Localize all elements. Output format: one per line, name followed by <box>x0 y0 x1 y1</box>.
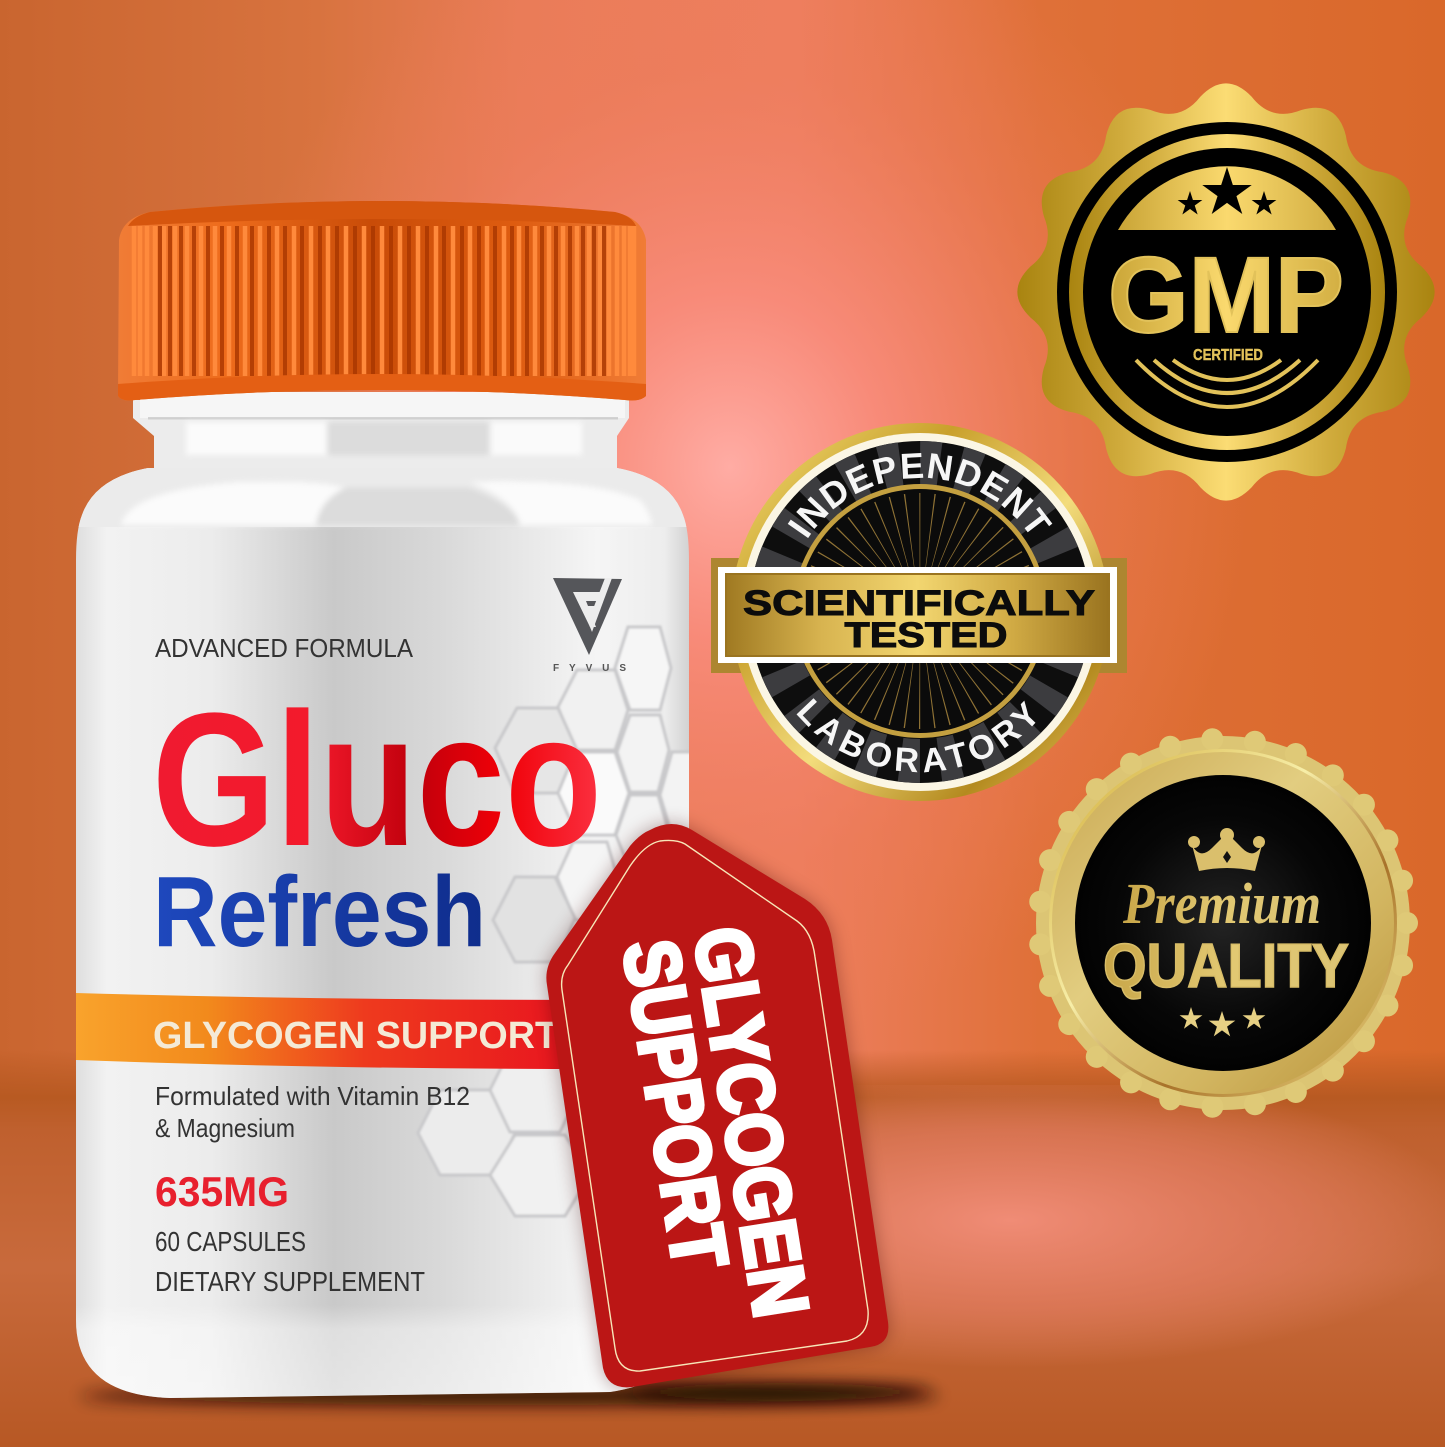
tag text: SUPPORT <box>606 934 745 1275</box>
stars <box>1178 167 1276 215</box>
scalloped seal <box>1036 736 1410 1110</box>
bottle shadow on floor <box>80 1383 940 1405</box>
brand logo: Fyvus <box>553 578 626 674</box>
arcs <box>1136 360 1318 407</box>
formulation text: Formulated with Vitamin B12 <box>155 1081 470 1111</box>
bottle body <box>70 465 695 1402</box>
gold ribbon <box>718 567 1117 663</box>
orange cap <box>118 201 646 400</box>
quality: QUALITY <box>1103 932 1349 1001</box>
ribbon tails <box>711 558 1127 673</box>
premium script: Premium <box>1122 871 1321 936</box>
tag text: GLYCOGEN <box>677 921 826 1323</box>
bottle neck <box>133 392 629 480</box>
label text: advanced formula: ADVANCED FORMULA <box>155 633 414 663</box>
supplement bottle <box>70 201 700 1402</box>
band text: GLYCOGEN SUPPORT <box>153 1015 558 1057</box>
ribbon text <box>743 584 1095 655</box>
product name: Gluco: Gluco <box>152 674 602 886</box>
badge: scientifically tested: LABORATORY <box>796 698 1036 772</box>
dosage: 635MG <box>155 1168 289 1215</box>
product name: Refresh: Refresh <box>153 856 486 968</box>
GMP lettering: GMP <box>1108 234 1344 355</box>
ribbon text: SCIENTIFICALLY <box>743 584 1095 623</box>
ring stripes <box>771 463 1069 761</box>
sunburst <box>858 549 982 673</box>
badge: GMP certified <box>1017 83 1435 501</box>
three stars <box>1180 1007 1265 1036</box>
formulation text: & Magnesium <box>155 1113 295 1143</box>
capsule count and supplement text <box>155 1226 425 1297</box>
badge: scientifically tested: INDEPENDENT <box>788 453 1052 538</box>
crown <box>1188 828 1265 871</box>
gold top arch <box>1118 166 1336 230</box>
gold seal <box>1017 83 1435 501</box>
brand logo: Fyvus: FYVUS <box>553 663 626 674</box>
ribbon text: TESTED <box>844 616 1008 655</box>
badge: scientifically tested <box>711 423 1127 801</box>
badge: premium quality <box>1036 736 1410 1110</box>
hexagon pattern <box>418 627 700 1216</box>
curved text <box>786 478 1054 612</box>
capsule count and supplement text: DIETARY SUPPLEMENT <box>155 1266 425 1297</box>
capsule count and supplement text: 60 CAPSULES <box>155 1226 306 1257</box>
orange band <box>76 993 600 1069</box>
tag text <box>606 921 826 1323</box>
red tag <box>546 824 888 1387</box>
formulation text <box>155 1081 470 1143</box>
certified: CERTIFIED <box>1193 347 1263 364</box>
